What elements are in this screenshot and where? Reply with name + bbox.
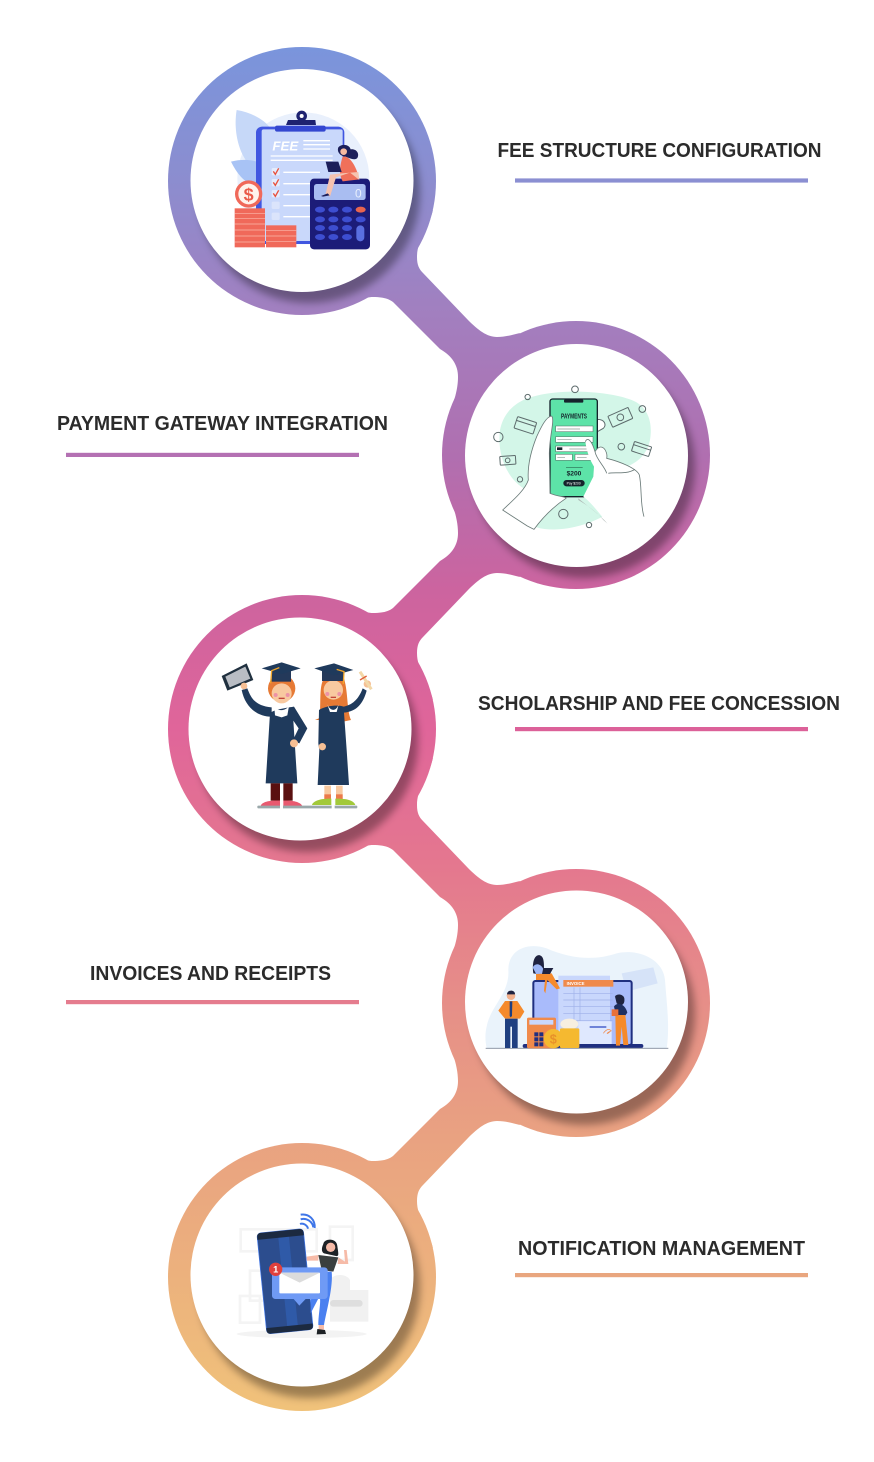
white discs	[188, 69, 688, 1386]
icon: invoice on laptop	[485, 946, 668, 1049]
heading: invoices and receipts: INVOICES AND RECEIPTS	[90, 962, 331, 985]
icon: fee clipboard and calculator: FEE	[272, 138, 299, 153]
underline: fee structure configuration	[515, 178, 808, 183]
underline: scholarship and fee concession	[515, 727, 808, 731]
underline: payment gateway integration	[66, 453, 359, 457]
underline: notification management	[515, 1273, 808, 1277]
heading: payment gateway integration: PAYMENT GATEWAY INTEGRATION	[57, 412, 388, 435]
icon: graduates	[222, 662, 371, 809]
icon: fee clipboard and calculator	[231, 110, 370, 249]
icon: mobile payments: Pay $200	[567, 482, 581, 486]
icon: fee clipboard and calculator: $	[244, 184, 254, 204]
underline: invoices and receipts	[66, 1000, 359, 1004]
icon: mobile payments	[494, 386, 652, 529]
ring inner shadows	[196, 81, 695, 1398]
heading: fee structure configuration: FEE STRUCTURE CONFIGURATION	[498, 139, 822, 162]
icon: fee clipboard and calculator: 0	[355, 186, 362, 200]
icon: notification on phone	[237, 1214, 368, 1338]
icon: invoice on laptop: INVOICE	[567, 981, 585, 986]
icon: mobile payments: PAYMENTS	[561, 413, 587, 420]
heading: notification management: NOTIFICATION MANAGEMENT	[518, 1237, 805, 1260]
heading: scholarship and fee concession: SCHOLARSHIP AND FEE CONCESSION	[478, 692, 840, 715]
timeline track with rings and connectors	[168, 47, 710, 1411]
icon: invoice on laptop: $	[550, 1032, 557, 1046]
icon: notification on phone: 1	[273, 1265, 278, 1275]
icon: mobile payments: $200	[567, 470, 582, 477]
